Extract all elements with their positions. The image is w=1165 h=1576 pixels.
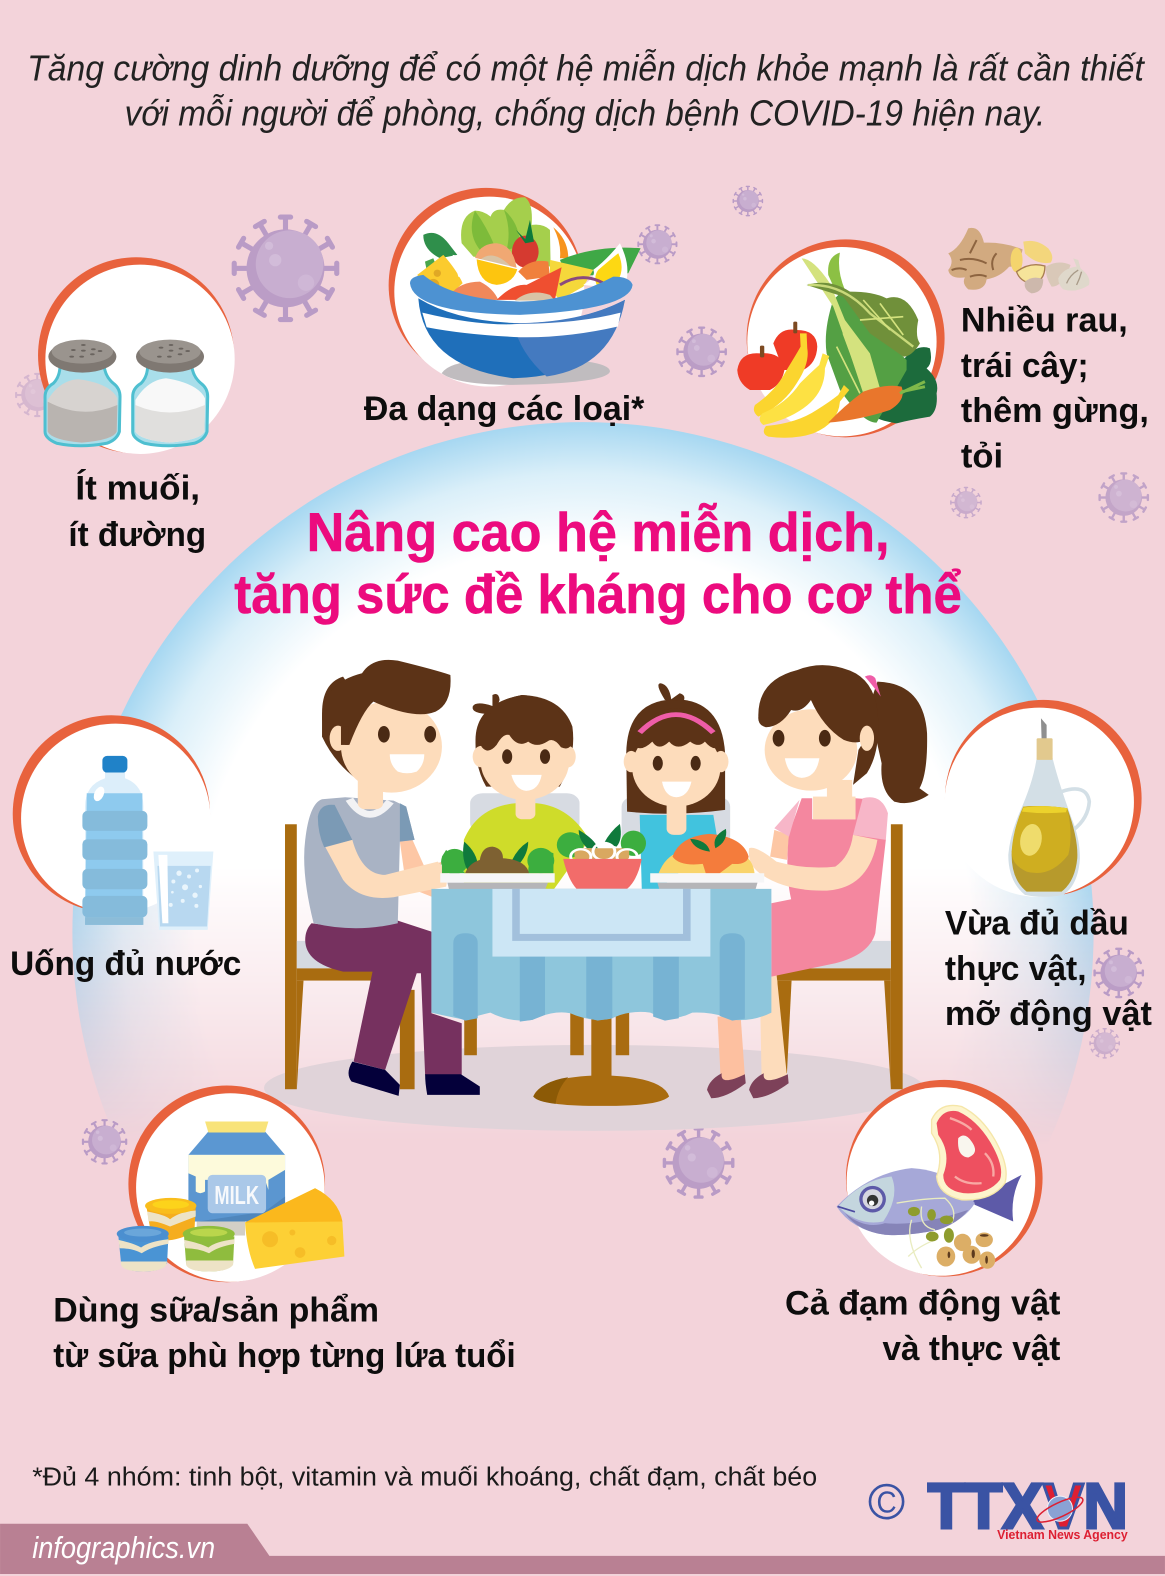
carrot <box>828 386 903 423</box>
virus: bottom centre <box>664 1129 733 1197</box>
virus: near bowl <box>638 225 676 263</box>
ring <box>128 1086 325 1282</box>
icon: fish <box>837 1168 1022 1235</box>
copyright symbol: C <box>876 1487 897 1520</box>
website label: infographics.vn <box>32 1532 215 1565</box>
floor shadow <box>264 1045 924 1131</box>
intro text: với mỗi người để phòng, chống dịch bệnh COVID-19 hiện nay. <box>125 93 1045 134</box>
copyright symbol <box>870 1485 903 1520</box>
virus: behind salt <box>16 374 58 416</box>
icon: oil bottle <box>1008 718 1089 897</box>
label: salt and sugar: ít đường <box>68 516 206 554</box>
virus: lower right small <box>1090 1029 1119 1058</box>
ginger root <box>948 228 1023 290</box>
chairs <box>285 824 903 1089</box>
boy <box>464 694 589 890</box>
kids' chair backs <box>470 793 730 847</box>
circle: vegetables and fruit with ginger and garlic <box>737 228 1089 438</box>
bowl body <box>418 298 625 378</box>
virus: lower left <box>83 1120 126 1163</box>
circle: oil <box>945 700 1142 897</box>
father <box>304 660 480 1096</box>
icon: salt jar left <box>45 340 120 446</box>
label: protein: và thực vật <box>883 1330 1060 1368</box>
label: oil and fat: mỡ động vật <box>945 995 1152 1033</box>
label: variety of foods: Đa dạng các loại* <box>364 390 645 428</box>
dishes on table <box>440 824 764 890</box>
circle: salt and sugar <box>38 257 235 454</box>
label: vegetables and fruit: thêm gừng, <box>961 392 1149 430</box>
virus: right small <box>951 487 981 518</box>
mother <box>707 665 929 1098</box>
girl <box>624 683 728 890</box>
label: salt and sugar <box>68 468 206 554</box>
label: vegetables and fruit: tỏi <box>961 437 1003 475</box>
dark leaf <box>877 347 937 423</box>
label: oil and fat: thực vật, <box>945 950 1087 988</box>
label: dairy products: Dùng sữa/sản phẩm <box>53 1292 379 1330</box>
ring <box>747 239 945 437</box>
icon: meat steak <box>932 1105 1006 1200</box>
label: vegetables and fruit <box>961 302 1149 475</box>
icon: beans <box>897 1198 995 1269</box>
label: drinking water: Uống đủ nước <box>10 945 241 983</box>
bananas <box>754 333 808 417</box>
label: dairy products: từ sữa phù hợp từng lứa tuổi <box>53 1337 516 1375</box>
label: oil and fat: Vừa đủ dầu <box>945 905 1129 943</box>
cabbage leaves <box>826 290 907 423</box>
ring <box>389 188 583 383</box>
virus: top small <box>733 186 762 216</box>
salad <box>417 197 641 302</box>
label: protein <box>785 1285 1060 1368</box>
label: vegetables and fruit: trái cây; <box>961 347 1089 385</box>
apples <box>773 329 817 370</box>
TTXVN logo: Vietnam News Agency <box>997 1527 1128 1542</box>
circle: dairy products <box>117 1086 344 1282</box>
icon: sugar jar right <box>133 340 208 446</box>
cut ginger and garlic <box>1023 241 1052 263</box>
virus: by oil label <box>1095 949 1143 997</box>
label: vegetables and fruit: Nhiều rau, <box>961 302 1128 340</box>
ring <box>846 1080 1043 1276</box>
icon: yoghurt cups <box>117 1198 235 1272</box>
ring <box>13 715 210 913</box>
icon: glass of water <box>153 852 213 930</box>
icon: milk jar <box>188 1122 285 1236</box>
table with cloth <box>431 889 771 1106</box>
label: dairy products <box>53 1292 516 1375</box>
TTXVN logo: TTXVN <box>928 1470 1128 1542</box>
main title: tăng sức đề kháng cho cơ thể <box>234 564 962 625</box>
virus: centre right <box>677 328 726 376</box>
blue dome behind family <box>72 422 1094 1116</box>
icon: milk jar: MILK <box>214 1180 259 1210</box>
circle: mixed food bowl <box>389 188 641 387</box>
ring <box>38 257 234 453</box>
label: protein: Cả đạm động vật <box>785 1285 1060 1323</box>
icon: cheese <box>245 1188 344 1269</box>
bowl shadow <box>442 362 610 385</box>
virus: right medium <box>1100 473 1148 522</box>
family at dining table <box>264 660 929 1131</box>
circle: animal and plant protein <box>837 1080 1043 1276</box>
main title: Nâng cao hệ miễn dịch, <box>307 502 890 563</box>
footnote: *Đủ 4 nhóm: tinh bột, vitamin và muối khoáng, chất đạm, chất béo <box>32 1462 817 1492</box>
ring <box>945 700 1142 897</box>
main title <box>234 502 962 625</box>
label: salt and sugar: Ít muối, <box>75 468 200 508</box>
intro text <box>27 47 1146 134</box>
circle: drinking water <box>13 715 213 930</box>
icon: water bottle <box>82 756 147 925</box>
footer bar and tab <box>0 1524 1165 1574</box>
virus: large top left <box>234 217 337 320</box>
label: oil and fat <box>945 905 1152 1033</box>
